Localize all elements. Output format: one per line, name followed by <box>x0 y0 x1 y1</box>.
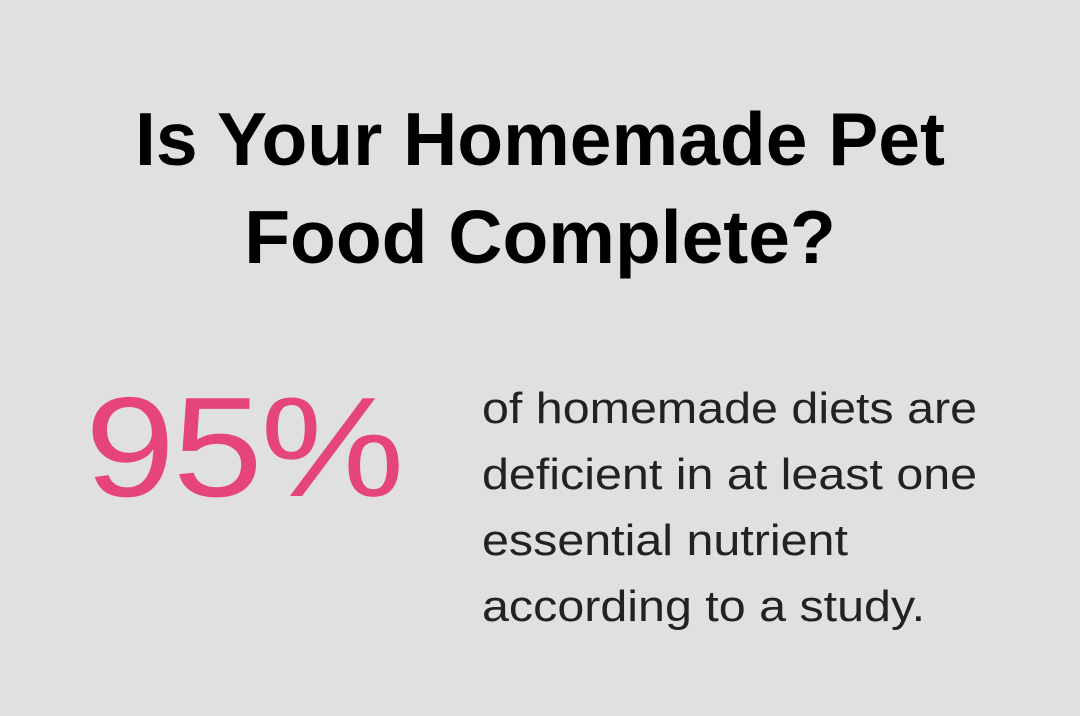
description text: deficient in at least one <box>482 450 977 499</box>
description text: essential nutrient <box>482 516 848 565</box>
title: Is Your Homemade Pet <box>135 97 945 181</box>
description text: of homemade diets are <box>482 384 977 433</box>
title: Food Complete? <box>244 195 836 279</box>
description text <box>482 384 977 631</box>
title <box>135 97 945 279</box>
statistic: 95%: 95% <box>85 368 402 527</box>
description text: according to a study. <box>482 582 925 631</box>
